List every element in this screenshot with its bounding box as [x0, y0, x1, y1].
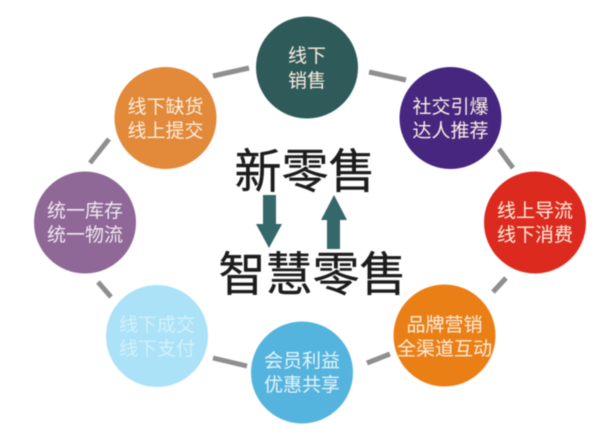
node: unified inventory: 统一库存 [47, 200, 123, 222]
node: member benefits [251, 322, 353, 424]
node: offline sales [256, 16, 358, 118]
node: unified inventory [34, 172, 136, 274]
arrow: up [321, 195, 347, 249]
connector: teal to orange [213, 68, 249, 76]
arrow: down [256, 195, 282, 248]
node: offline sales: 销售 [288, 70, 326, 92]
connector: blue to light blue [213, 358, 247, 366]
node: brand marketing [394, 284, 496, 386]
node: unified inventory: 统一物流 [47, 224, 123, 246]
node: brand marketing: 全渠道互动 [397, 338, 492, 360]
node: offline payment: 线下成交 [119, 314, 195, 336]
node: social media [400, 67, 502, 169]
connector: teal to dark purple [369, 72, 406, 80]
node: social media: 达人推荐 [412, 120, 489, 142]
node: member benefits: 优惠共享 [264, 374, 340, 396]
connector: orange to purple [90, 139, 109, 163]
node: social media: 社交引爆 [412, 96, 489, 118]
connector: red to deep orange [493, 278, 506, 292]
node: online to offline: 线下消费 [497, 224, 573, 246]
node: member benefits: 会员利益 [264, 350, 340, 372]
node: out of stock: 线下缺货 [127, 96, 204, 118]
heading: smart retail: 智慧零售 [218, 248, 406, 301]
connector: light blue to purple [98, 282, 111, 297]
node: offline payment: 线下支付 [119, 338, 195, 360]
node: online to offline [484, 172, 586, 274]
node: brand marketing: 品牌营销 [406, 314, 483, 336]
node: out of stock: 线上提交 [127, 120, 204, 142]
node: offline payment [106, 285, 208, 387]
heading: new retail: 新零售 [234, 145, 376, 198]
node: out of stock [114, 67, 216, 169]
node: online to offline: 线上导流 [497, 200, 573, 222]
connector: dark purple to red [499, 149, 513, 168]
connector: deep orange to blue [367, 354, 390, 363]
node: offline sales: 线下 [288, 45, 326, 67]
